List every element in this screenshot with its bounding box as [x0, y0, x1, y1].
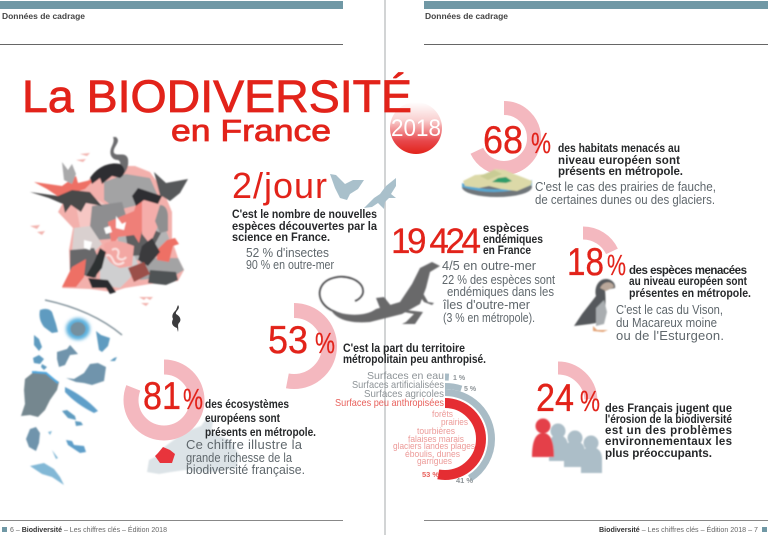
text 68 bold: présents en métropole. [558, 166, 683, 178]
text 53 bold: C'est la part du territoire [343, 343, 465, 355]
land use chart: garrigues [417, 456, 452, 467]
panel: 53 percent [258, 310, 507, 501]
text 81 detail [186, 437, 305, 477]
text 2 per day bold: espèces découvertes par la [232, 221, 378, 233]
text 19424 detail: (3 % en métropole). [443, 310, 535, 325]
text 24 bold: l'érosion de la biodiversité [605, 414, 732, 426]
icon: France star [155, 447, 175, 463]
figure 18: 18 [567, 241, 604, 284]
land use chart: Surfaces en eau [367, 370, 444, 382]
text 19424 detail: endémiques dans les [447, 284, 554, 299]
text 53 bold: métropolitain peu anthropisé. [343, 354, 486, 366]
year badge 2018: 2018 [391, 115, 441, 142]
title [22, 71, 412, 148]
text 19424 bold [483, 223, 543, 257]
land use chart: 5 % [464, 386, 477, 393]
center page fold [384, 0, 386, 535]
text 19424 detail [442, 258, 555, 325]
text 81 bold: européens sont [205, 413, 280, 425]
figure 24: % [580, 386, 600, 418]
land use chart: 53 % [422, 470, 439, 479]
icon: butterfly [330, 174, 364, 200]
text 19424 detail: îles d'outre-mer [442, 297, 531, 312]
text 24 bold: des Français jugent que [605, 403, 732, 415]
text 19424 detail: 22 % des espèces sont [442, 272, 555, 287]
text 18 bold: au niveau européen sont [629, 276, 747, 288]
icon: landscape [462, 169, 532, 197]
figure 81: % [183, 384, 203, 416]
land use chart: Surfaces artificialisées [352, 379, 444, 391]
panel: 81 percent [131, 367, 316, 477]
donut 68 [474, 108, 534, 168]
text 2 per day bold: science en France. [232, 232, 330, 244]
text 2 per day detail [246, 245, 335, 272]
title: La BIODIVERSITÉ [22, 71, 412, 122]
text 19424 bold: endémiques [483, 234, 543, 246]
text 53 bold [343, 343, 486, 366]
text 18 bold: présentes en métropole. [629, 288, 751, 300]
text 68 detail [535, 179, 716, 207]
text 81 detail: Ce chiffre illustre la [186, 437, 303, 452]
text 18 detail [616, 302, 724, 343]
panel: 68 percent [462, 108, 716, 207]
footer right: Biodiversité – Les chiffres clés – Édition 2018 – 7 [599, 525, 758, 534]
text 18 detail: C'est le cas du Vison, [616, 302, 723, 317]
header left [0, 1, 343, 45]
land use chart: glaciers landes plages [393, 441, 475, 452]
text 24 bold: environnementaux les [605, 436, 732, 448]
donut 81 [131, 367, 197, 433]
text 18 detail: du Macareux moine [616, 315, 717, 330]
header left: Données de cadrage [2, 11, 85, 21]
text 24 bold [605, 403, 732, 460]
land use chart: éboulis, dunes [405, 449, 460, 460]
panel: 18 percent [551, 233, 751, 343]
figure 19424: 19 424 [391, 222, 481, 261]
text 2 per day detail: 90 % en outre-mer [246, 257, 335, 272]
text 24 bold: plus préoccupants. [605, 448, 712, 460]
header right: Données de cadrage [425, 11, 508, 21]
text 81 bold: des écosystèmes [205, 399, 289, 411]
figure 68 [483, 119, 551, 162]
text 24 bold: est un des problèmes [605, 425, 732, 437]
icon: puffin [574, 279, 615, 332]
text 18 detail: ou de l'Esturgeon. [616, 328, 724, 343]
text 81 bold: présents en métropole. [205, 427, 316, 439]
figure 53: 53 [268, 319, 308, 362]
land use chart: Surfaces peu anthropisées [335, 397, 444, 409]
text 81 detail: grande richesse de la [186, 450, 293, 465]
land use chart [335, 370, 507, 501]
text 18 bold: des espèces menacées [629, 265, 747, 277]
text 68 bold [558, 143, 683, 178]
figure 53: % [315, 328, 335, 360]
figure 53 [268, 319, 335, 362]
text 19424 bold: espèces [483, 223, 529, 235]
land use chart: 1 % [453, 375, 466, 382]
text 19424 detail: 4/5 en outre-mer [442, 258, 537, 273]
map of France made of animal silhouettes [30, 137, 188, 306]
text 2 per day bold: C'est le nombre de nouvelles [232, 209, 377, 221]
figure 81: 81 [143, 375, 181, 418]
land use chart: Surfaces agricoles [364, 388, 444, 400]
footer right [424, 520, 768, 534]
panel: 24 percent [525, 368, 732, 473]
land use chart: forêts [432, 409, 453, 420]
panel: 2 per day [232, 165, 396, 272]
text 19424 bold: en France [483, 245, 531, 257]
text 68 bold: niveau européen sont [558, 155, 680, 167]
land use chart: tourbières [417, 426, 455, 437]
text 81 bold [205, 399, 316, 439]
icon: people [532, 418, 602, 473]
header right [424, 1, 768, 45]
figure 68: 68 [483, 119, 523, 162]
Europe mini-map [147, 418, 239, 474]
panel: 19424 species [320, 222, 555, 325]
footer left: 6 – Biodiversité – Les chiffres clés – Édition 2018 [10, 525, 167, 534]
figure 24 [536, 377, 600, 420]
icon: beetle [364, 178, 396, 209]
text 2 per day detail: 52 % d'insectes [246, 245, 329, 260]
donut 18 [551, 233, 615, 297]
year badge 2018 [390, 102, 442, 154]
donut 53 [258, 310, 330, 382]
figure 24: 24 [536, 377, 574, 420]
text 2 per day bold [232, 209, 378, 244]
text 68 bold: des habitats menacés au [558, 143, 680, 155]
figure 68: % [531, 128, 551, 160]
text 68 detail: de certaines dunes ou des glaciers. [535, 192, 715, 207]
title: en France [171, 113, 331, 148]
icon: lizard [320, 262, 440, 324]
text 18 bold [629, 265, 751, 300]
land use chart: falaises marais [408, 434, 464, 445]
icon: small snake [172, 305, 180, 332]
donut 24 [525, 368, 591, 434]
figure 2/jour: 2/jour [232, 165, 327, 206]
land use chart: 41 % [456, 476, 473, 485]
land use chart: prairies [441, 417, 468, 428]
footer left [0, 520, 343, 534]
overseas territories map [21, 300, 122, 485]
text 68 detail: C'est le cas des prairies de fauche, [535, 179, 716, 194]
text 81 detail: biodiversité française. [186, 462, 305, 477]
figure 18: % [607, 250, 626, 282]
